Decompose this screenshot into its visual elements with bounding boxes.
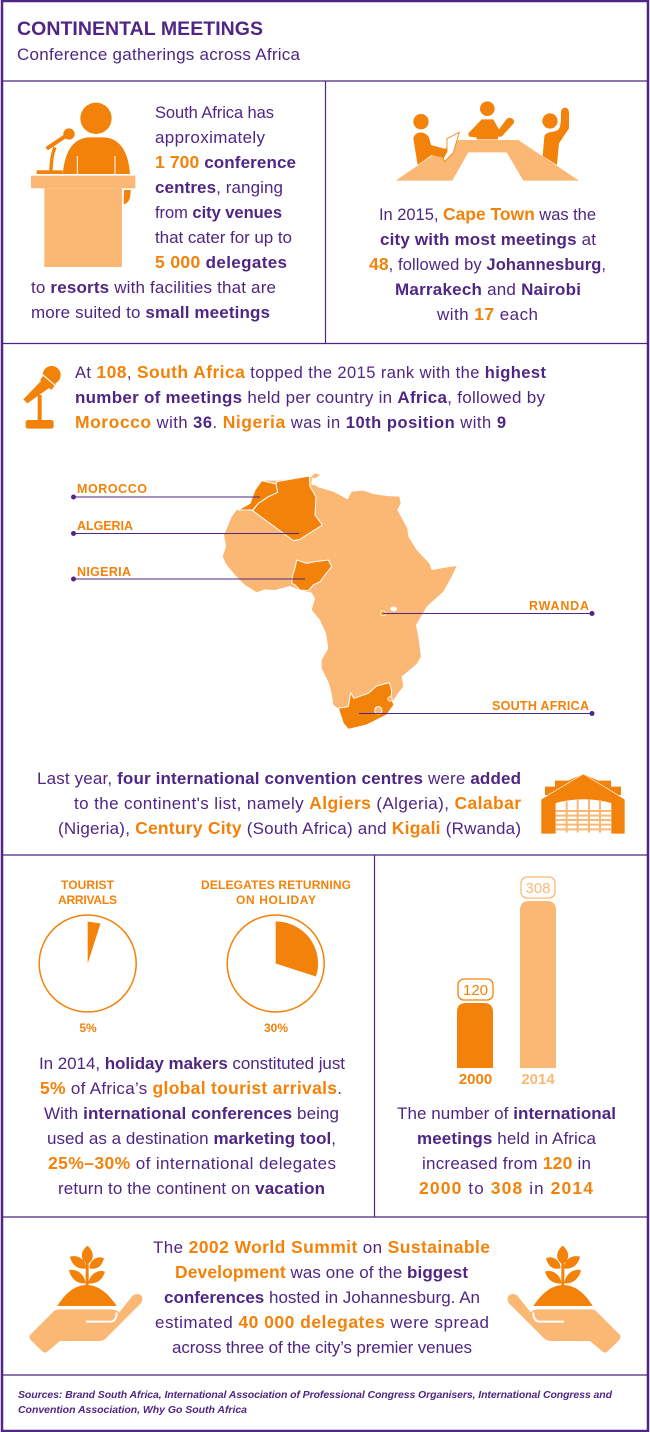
text: World Summit [153,1237,490,1357]
text: holiday makers: 25%–30% of international delegates [48,1153,336,1173]
title [17,18,301,64]
icon: people around a table [396,101,579,181]
text: international meetings: The number of international [397,1104,616,1123]
text: conference centres: that cater for up to [155,228,292,247]
text: convention centres [37,769,521,838]
icon: speaker at podium [31,103,135,267]
icon: hand holding plant, left [29,1246,143,1353]
text: convention centres: to the continent's list, namely Algiers (Algeria), Calabar [74,793,521,813]
text: meetings per country: number of meetings held per country in Africa, followed by [75,388,546,407]
panel: convention centres [37,769,625,838]
text: meetings per country [75,362,546,432]
text: conference centres: centres, ranging [155,178,283,197]
pie chart: delegates returning: ON HOLIDAY [236,893,316,907]
text: international meetings: 2000 to 308 in 2014 [419,1178,593,1198]
callout: Nigeria [71,565,305,582]
text: most meetings by city: with 17 each [436,304,538,324]
text: World Summit: Development was one of the biggest [175,1262,468,1282]
text: most meetings by city: In 2015, Cape Town was the [379,204,596,224]
callout: Rwanda [384,599,594,616]
callout: Rwanda: RWANDA [529,599,589,613]
panel: international meetings [397,877,616,1198]
bar chart: meetings 2000 vs 2014: 2014 [521,1071,555,1088]
text: most meetings by city [369,204,606,324]
icon: microphone on stand [23,366,61,429]
callout: South Africa: SOUTH AFRICA [492,699,589,713]
pie chart: tourist arrivals: TOURIST [61,878,115,892]
pie chart: delegates returning [201,878,351,1035]
panel: most meetings by city [369,101,606,324]
text: meetings per country: Morocco with 36. Nigeria was in 10th position with 9 [75,412,506,432]
text: convention centres: (Nigeria), Century City (South Africa) and Kigali (Rwanda) [58,818,521,838]
text: conference centres: more suited to small meetings [31,303,270,322]
subtitle: Conference gatherings across Africa [17,45,301,64]
text: conference centres: 5 000 delegates [155,252,287,272]
text: international meetings: increased from 120 in [422,1153,591,1173]
text: meetings per country: At 108, South Africa topped the 2015 rank with the highest [75,362,546,382]
text: most meetings by city: Marrakech and Nairobi [395,280,581,299]
text: holiday makers: In 2014, holiday makers constituted just [39,1054,345,1073]
text: conference centres [31,104,296,322]
text: conference centres: South Africa has [155,104,274,122]
pie chart: tourist arrivals: ARRIVALS [58,893,117,907]
panel: conference centres [31,103,296,322]
pie chart: delegates returning: DELEGATES RETURNING [201,878,351,892]
text: conference centres: approximately [155,128,266,147]
text: World Summit: The 2002 World Summit on Sustainable [153,1237,490,1257]
panel: World Summit [29,1237,621,1357]
map: continent and highlighted countries [223,473,457,729]
icon: convention building [541,774,625,834]
callout: Algeria: ALGERIA [77,519,133,533]
bar chart: meetings 2000 vs 2014: 120 [463,982,488,999]
text: conference centres: from city venues [155,204,282,222]
callout: Morocco: MOROCCO [77,482,147,496]
text: conference centres: to resorts with facilities that are [31,278,276,297]
text: convention centres: Last year, four international convention centres were added [37,769,521,788]
text: international meetings: meetings held in Africa [417,1129,597,1148]
text: conference centres: 1 700 conference [155,152,296,172]
panel: meetings per country [23,362,547,432]
bar chart: meetings 2000 vs 2014 [457,877,556,1088]
bar chart: meetings 2000 vs 2014: 2000 [459,1071,492,1088]
bar chart: meetings 2000 vs 2014: 308 [525,880,551,897]
text: most meetings by city: 48, followed by Johannesburg, [369,254,606,274]
title: CONTINENTAL MEETINGS [17,18,263,40]
sources: Convention Association, Why Go South Africa [18,1404,247,1416]
text: holiday makers: With international conferences being [44,1104,339,1123]
text: World Summit: conferences hosted in Johannesburg. An [164,1288,480,1307]
text: World Summit: estimated 40 000 delegates were spread [155,1312,489,1332]
pie chart: delegates returning: 30% [264,1021,288,1035]
map of Africa [71,473,594,729]
pie chart: tourist arrivals [39,878,136,1035]
icon: hand holding plant, right [507,1246,621,1353]
text: holiday makers: return to the continent on vacation [58,1179,325,1198]
panel: tourist arrivals and delegates [39,878,351,1198]
text: holiday makers: 5% of Africa’s global tourist arrivals. [40,1078,342,1098]
sources: Sources: Brand South Africa, International Association of Professional Congress Organisers, International Congress and [18,1389,613,1401]
callout: South Africa [359,699,594,716]
callout: Morocco [71,482,260,500]
callout: Nigeria: NIGERIA [77,565,131,579]
callout: Algeria [71,519,299,536]
text: World Summit: across three of the city’s premier venues [172,1338,472,1357]
text: holiday makers: used as a destination marketing tool, [47,1129,336,1148]
pie chart: tourist arrivals: 5% [79,1021,97,1035]
text: holiday makers [39,1054,345,1198]
text: most meetings by city: city with most meetings at [380,230,596,249]
sources [18,1389,613,1416]
text: international meetings [397,1104,616,1198]
